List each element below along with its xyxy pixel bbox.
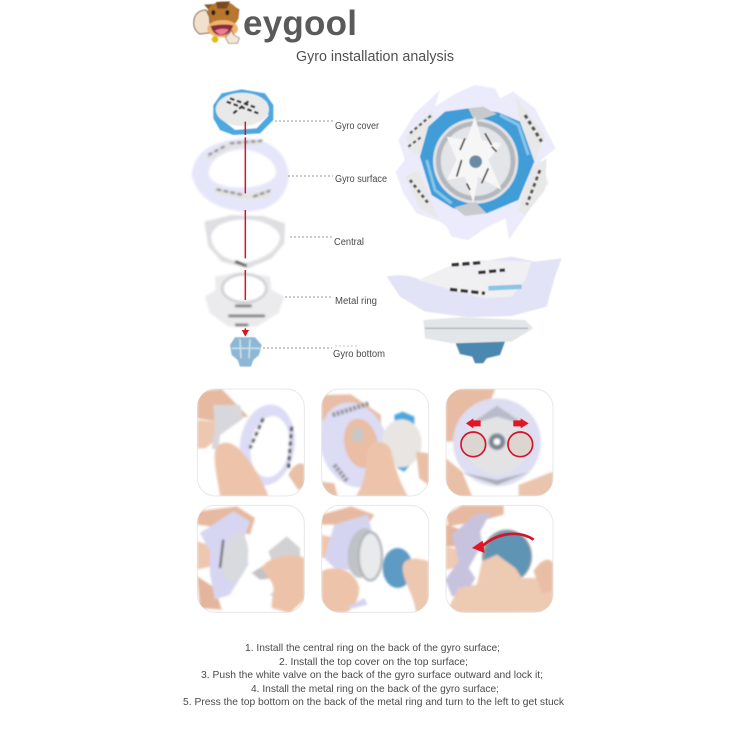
exploded diagram of gyro parts <box>192 89 289 367</box>
step 1 text: 1. Install the central ring on the back of the gyro surface; <box>245 642 500 654</box>
step 5 text: 5. Press the top bottom on the back of the metal ring and turn to the left to get stuck <box>183 696 565 708</box>
part: gyro surface <box>192 138 289 212</box>
blue octagon <box>420 108 534 213</box>
lavender wing outline <box>396 85 556 240</box>
label: gyro surface: Gyro surface <box>335 174 387 185</box>
photo step 6 <box>445 505 553 613</box>
part: gyro cover <box>213 89 273 135</box>
label: metal ring: Metal ring <box>335 296 377 307</box>
icon: cow mascot <box>194 1 239 43</box>
step 3 text: 3. Push the white valve on the back of the gyro surface outward and lock it; <box>201 669 543 681</box>
step 4 text: 4. Install the metal ring on the back of the gyro surface; <box>251 683 499 695</box>
photo step 5 <box>322 505 429 612</box>
product photo: top view <box>396 85 556 240</box>
translucent disc <box>433 118 518 204</box>
label: gyro cover: Gyro cover <box>335 121 380 132</box>
logo: eygool with cow mascot <box>194 1 357 43</box>
installation instructions text <box>183 642 565 708</box>
photo step 4 <box>197 505 304 613</box>
instruction photos, row 1 <box>197 389 553 497</box>
product photo: side view <box>387 257 562 363</box>
callout leader lines <box>263 121 358 348</box>
instruction photos, row 2 <box>197 505 553 613</box>
logo wordmark: eygool <box>243 4 357 43</box>
part: gyro bottom <box>230 337 262 367</box>
photo step 2 <box>309 389 429 497</box>
part: metal ring <box>205 272 284 327</box>
title: Gyro installation analysis <box>296 49 454 65</box>
photo step 1 <box>197 389 304 496</box>
silver fins <box>406 111 434 155</box>
arrow: red assembly axis <box>242 122 249 337</box>
step 2 text: 2. Install the top cover on the top surface; <box>279 656 468 668</box>
label: central: Central <box>334 237 364 248</box>
part: central ring <box>204 215 285 268</box>
photo step 3 <box>446 389 553 496</box>
label: gyro bottom: Gyro bottom <box>333 349 385 360</box>
